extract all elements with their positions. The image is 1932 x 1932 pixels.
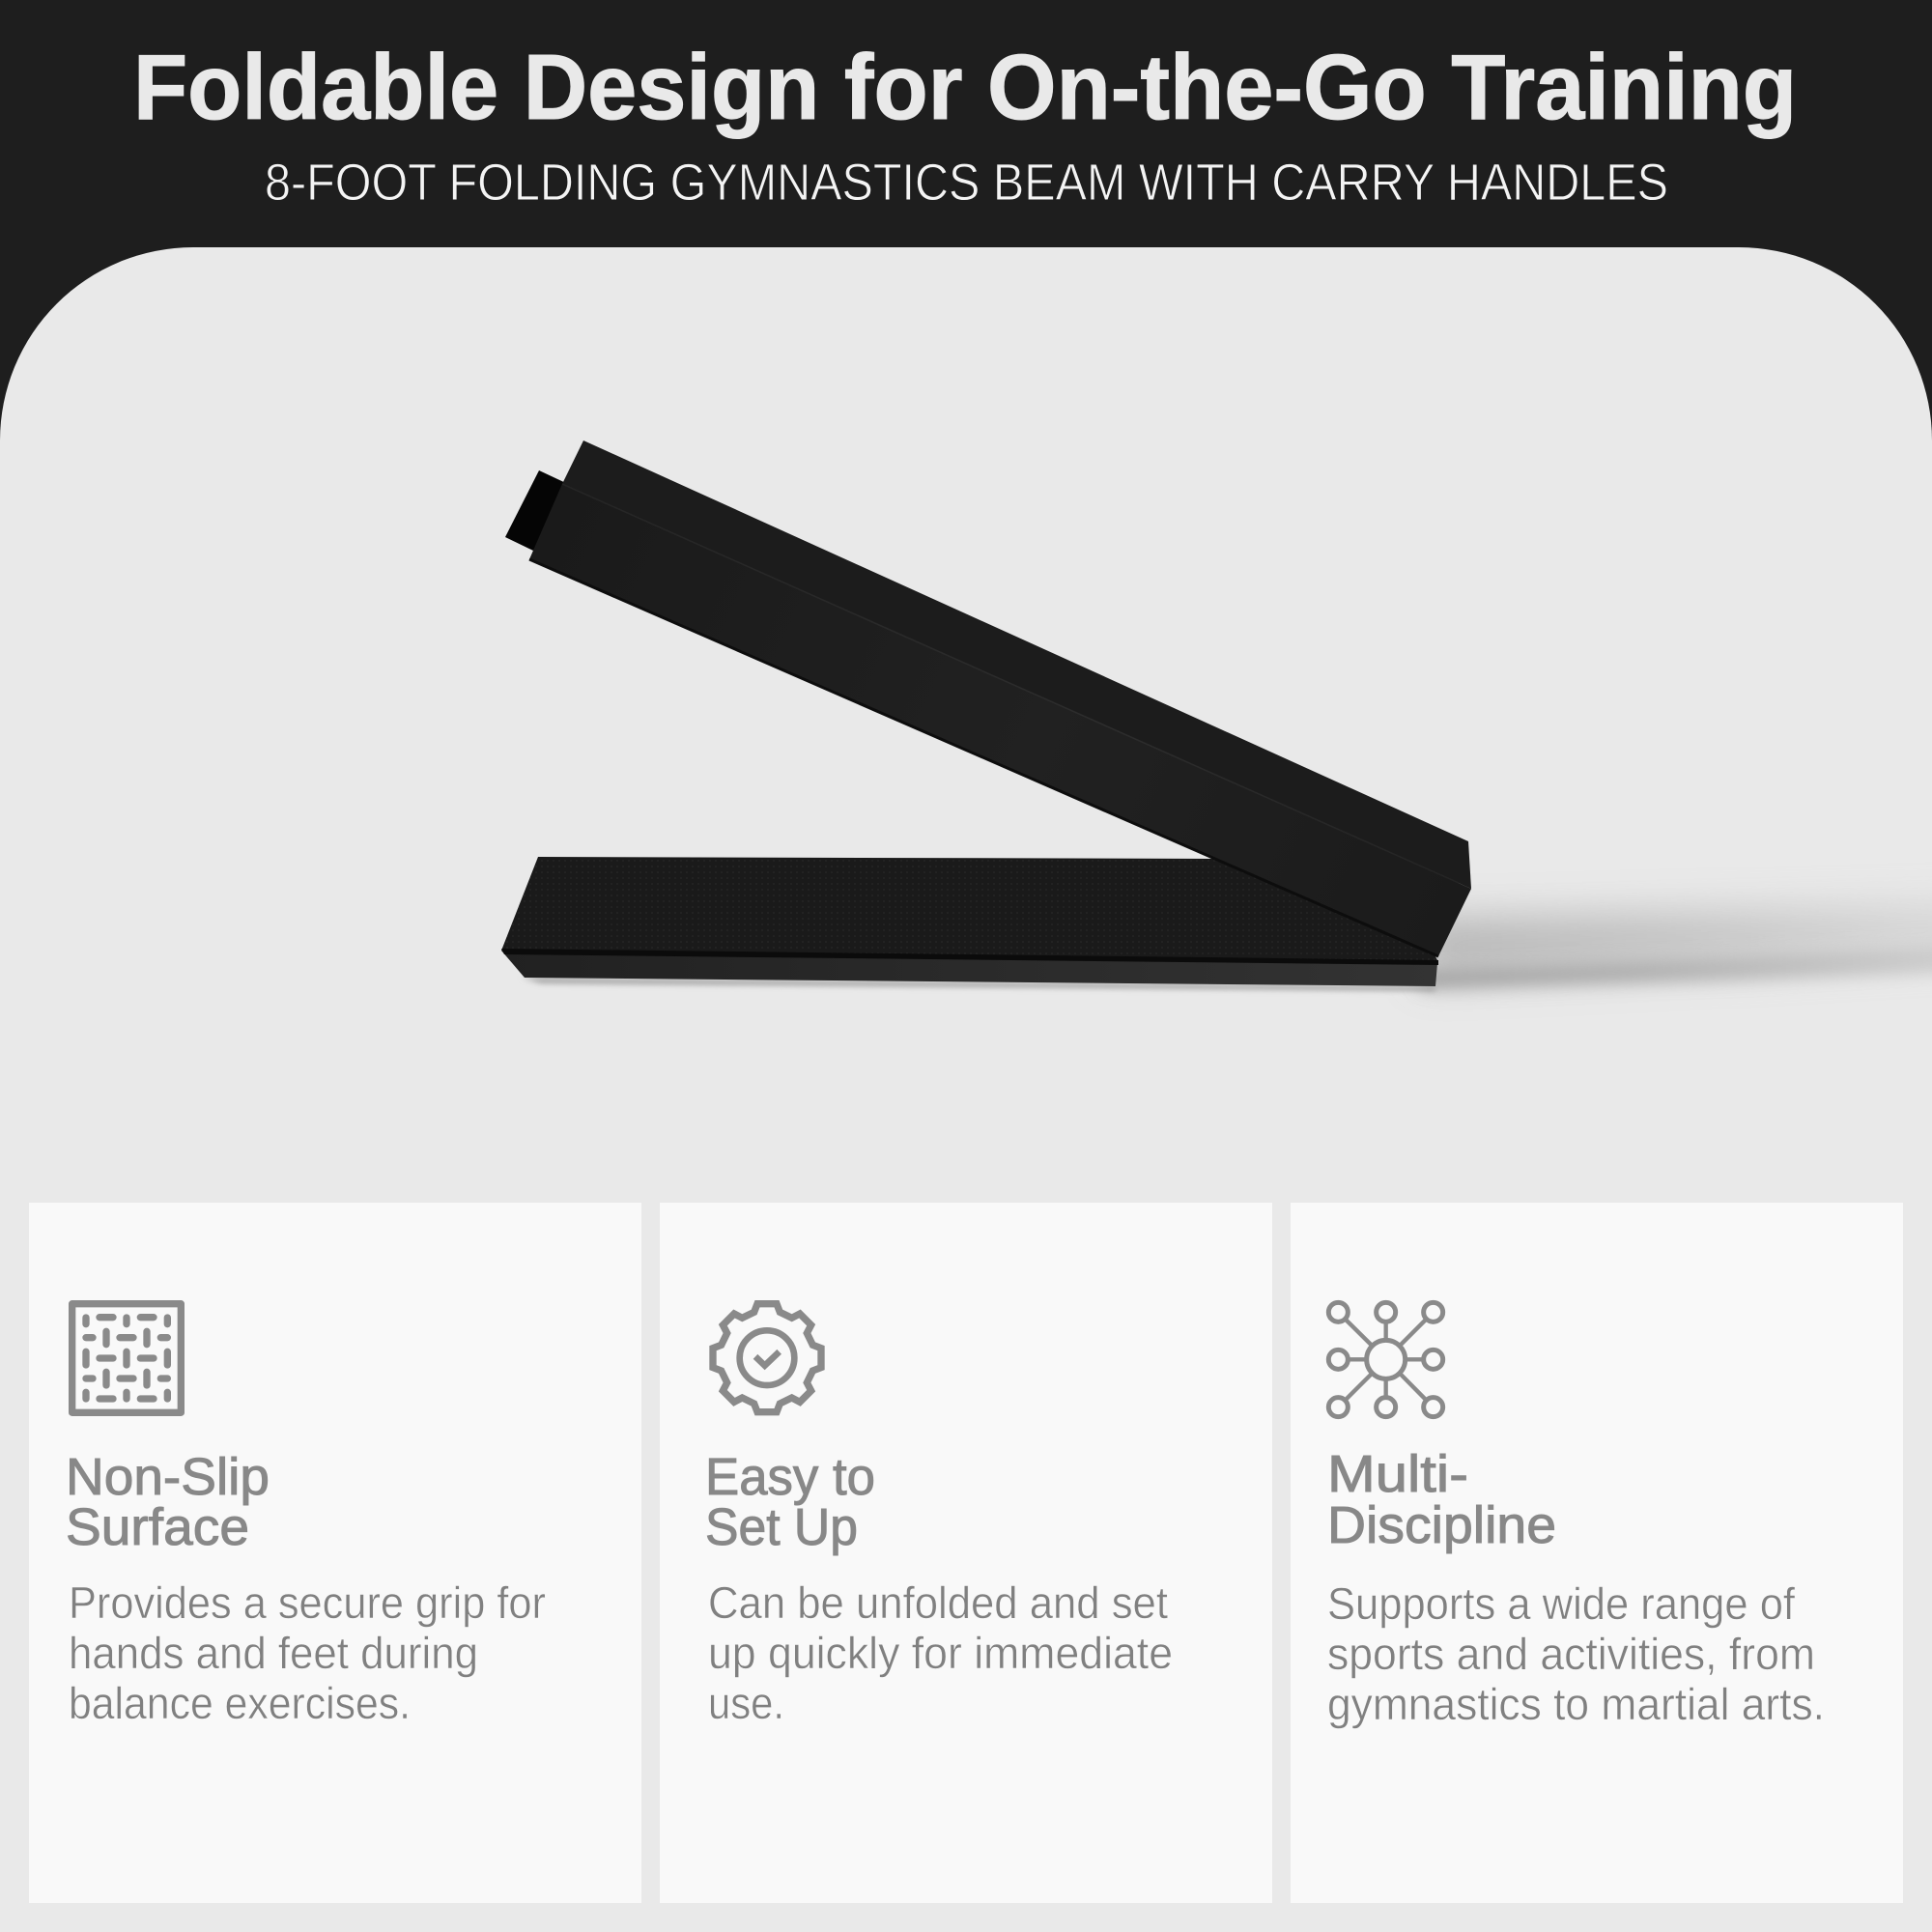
heading [705, 1448, 875, 1556]
lower beam section top face [501, 857, 1438, 962]
lower beam section side face [501, 951, 1437, 986]
description: Supports a wide range of [1327, 1578, 1795, 1629]
carry handle flap [505, 470, 570, 551]
description: up quickly for immediate [708, 1628, 1173, 1678]
icon: network hub [1328, 1302, 1443, 1417]
heading [66, 1448, 270, 1556]
heading: Non-Slip [66, 1448, 270, 1506]
heading: Easy to [705, 1448, 875, 1506]
description: hands and feet during [69, 1628, 478, 1678]
icon: gear with check [713, 1304, 821, 1412]
description: gymnastics to martial arts. [1327, 1679, 1825, 1729]
description: balance exercises. [69, 1678, 411, 1728]
header background [0, 0, 1932, 444]
upper beam section [529, 440, 1471, 956]
heading: Surface [66, 1498, 249, 1556]
heading: Multi- [1327, 1445, 1468, 1503]
lower beam seam [501, 949, 1438, 965]
card: easy to set up [660, 1203, 1272, 1903]
beam cast shadow [522, 903, 1932, 991]
title: Foldable Design for On-the-Go Training [133, 36, 1797, 139]
icon: textured grid [72, 1304, 181, 1412]
description: use. [708, 1678, 784, 1728]
description [69, 1577, 546, 1728]
heading [1327, 1445, 1556, 1554]
card: non-slip surface [29, 1203, 641, 1903]
heading: Discipline [1327, 1496, 1556, 1554]
description [1327, 1578, 1825, 1729]
description: sports and activities, from [1327, 1629, 1815, 1679]
heading: Set Up [705, 1498, 858, 1556]
description: Provides a secure grip for [69, 1577, 546, 1628]
folded beam product image [501, 440, 1932, 991]
card: multi-discipline [1291, 1203, 1903, 1903]
subtitle: 8-FOOT FOLDING GYMNASTICS BEAM WITH CARRY HANDLES [265, 154, 1668, 212]
description [708, 1577, 1173, 1728]
description: Can be unfolded and set [708, 1577, 1168, 1628]
